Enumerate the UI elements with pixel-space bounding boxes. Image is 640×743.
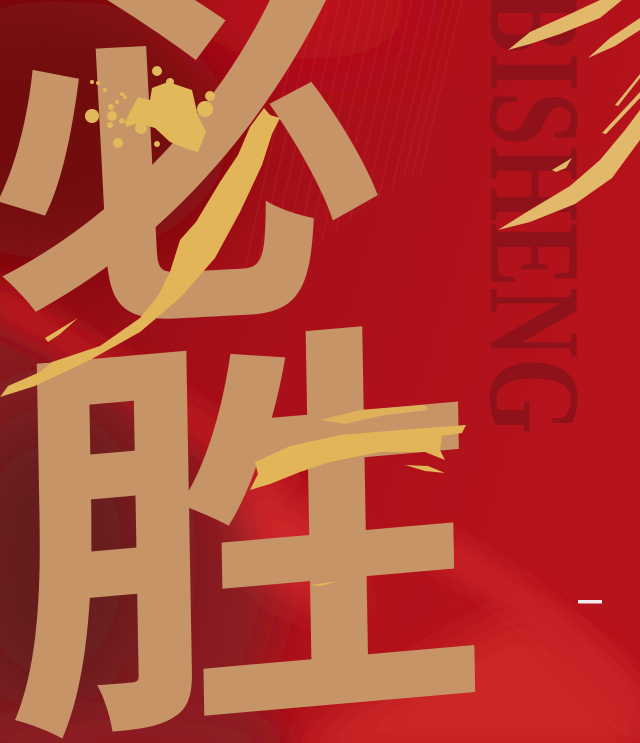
background: pinstripe band	[238, 0, 462, 300]
gold brush strokes top right	[498, 0, 640, 230]
latin word: BISHENG: BISHENG	[462, 0, 607, 434]
white dash	[578, 600, 602, 604]
gold splash	[85, 66, 215, 152]
gold brush stroke across 必	[0, 108, 280, 397]
gold brush strokes across 胜	[250, 405, 466, 586]
